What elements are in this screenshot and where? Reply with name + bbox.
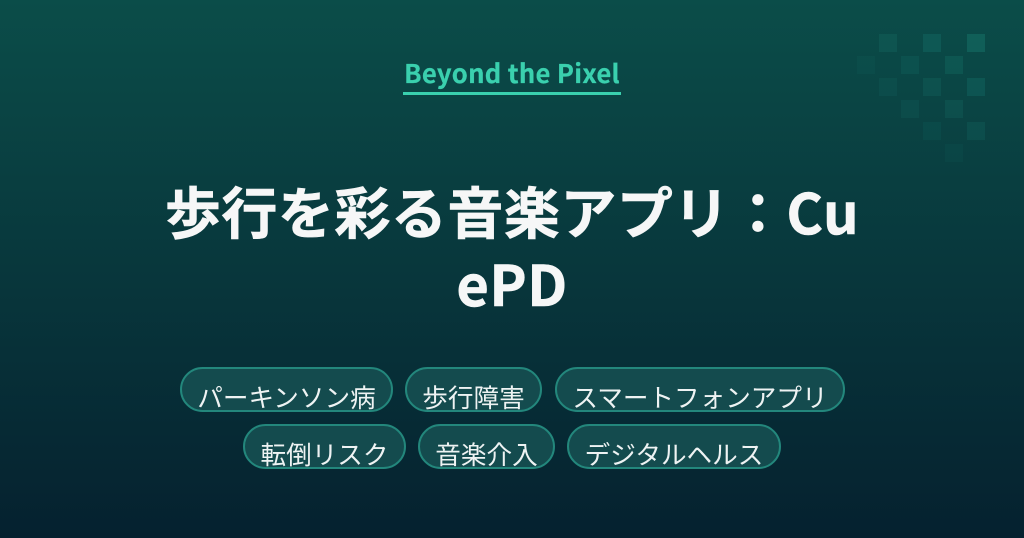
tag: デジタルヘルス (567, 424, 781, 469)
tag: 歩行障害: 歩行障害 (422, 378, 525, 415)
tag: スマートフォンアプリ (555, 367, 845, 412)
title: 歩行を彩る音楽アプリ：Cu (165, 170, 859, 251)
tag: 音楽介入: 音楽介入 (435, 435, 538, 472)
title: ePD (456, 242, 568, 323)
tag: デジタルヘルス: デジタルヘルス (585, 435, 763, 472)
tag: パーキンソン病: パーキンソン病 (197, 378, 376, 415)
decorative pixel pattern (879, 34, 985, 140)
tag: 歩行障害 (405, 367, 542, 412)
tag list (180, 367, 845, 472)
brand label: Beyond the Pixel: Beyond the Pixel (404, 54, 620, 91)
tag: 音楽介入 (418, 424, 555, 469)
tag: 転倒リスク (243, 424, 406, 469)
tag: 転倒リスク: 転倒リスク (260, 435, 388, 472)
tag: パーキンソン病 (180, 367, 393, 412)
tag: スマートフォンアプリ: スマートフォンアプリ (572, 378, 828, 415)
title (165, 170, 859, 323)
